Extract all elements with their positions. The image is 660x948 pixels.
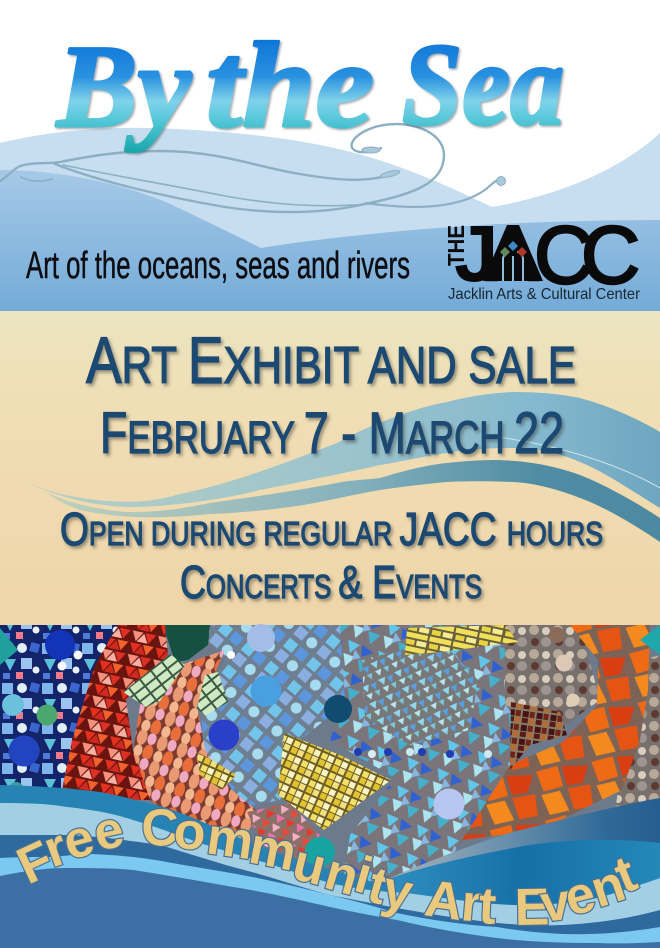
right deep blue band bbox=[385, 840, 660, 945]
panel: bottom waves bbox=[0, 785, 660, 948]
mosaic: pink fragments bbox=[247, 803, 320, 858]
logo: The JACC: C bbox=[581, 210, 640, 301]
mosaic: oval pink and orange band bbox=[132, 650, 262, 840]
title: By the Sea bbox=[55, 18, 564, 153]
panel: sand event details bbox=[0, 311, 660, 626]
logo: The JACC: A bbox=[484, 210, 542, 298]
panel: mosaic artwork bbox=[0, 624, 660, 915]
decorative swirl ribbon bbox=[0, 124, 506, 212]
dark blue band bbox=[0, 835, 660, 945]
logo: The JACC: THE bbox=[443, 225, 469, 266]
mosaic: triangle field bbox=[330, 625, 530, 900]
mosaic: silver discs bbox=[505, 625, 600, 725]
mosaic: orange shards bbox=[462, 625, 650, 840]
mosaic: small yellow block bbox=[197, 752, 236, 790]
mosaic: pale spiral bbox=[362, 640, 478, 745]
heading: dates: FEBRUARY 7 - MARCH 22 bbox=[100, 401, 564, 466]
header mid wave bbox=[0, 170, 660, 311]
mosaic: pale green tiles bbox=[123, 654, 185, 707]
light blue stripe bbox=[0, 854, 660, 948]
title: By the Sea: the bbox=[206, 18, 374, 153]
header light wave bbox=[0, 128, 660, 311]
mosaic: red fish bbox=[60, 625, 168, 800]
mosaic: yellow stripes bbox=[405, 625, 518, 655]
mosaic: glass discs bbox=[0, 624, 660, 867]
mosaic: left blue field bbox=[0, 625, 125, 800]
subtitle: Art of the oceans, seas and rivers bbox=[26, 245, 410, 287]
logo: The JACC: Jacklin Arts & Cultural Center bbox=[448, 286, 641, 303]
text: open during regular hours: OPEN DURING REGULAR JACC HOURS bbox=[60, 503, 603, 555]
mosaic: blue tile field bbox=[195, 625, 350, 810]
logo: The JACC: J bbox=[454, 209, 498, 298]
mosaic: dark green bbox=[163, 625, 210, 662]
logo: The JACC: C bbox=[534, 210, 593, 301]
heading: art exhibit and sale: ART EXHIBIT AND SALE bbox=[86, 323, 576, 397]
text: concerts and events: CONCERTS & EVENTS bbox=[180, 556, 482, 608]
title: By the Sea: Sea bbox=[402, 19, 564, 150]
swoosh wave bbox=[18, 392, 660, 542]
mosaic: large yellow tile sculpture bbox=[278, 733, 391, 830]
title: By the Sea: By bbox=[55, 21, 192, 152]
right grey-blue wave bbox=[385, 798, 660, 945]
pale blue band bbox=[0, 803, 660, 945]
mosaic: brown tiles bbox=[510, 702, 567, 770]
arched text: free community art event: Free Community Art Event bbox=[9, 799, 645, 937]
right deep blue repaint bbox=[385, 840, 660, 945]
main dark blue base bbox=[0, 868, 660, 948]
left blue band bbox=[0, 785, 660, 948]
panel: header bbox=[0, 0, 660, 311]
logo: The JACC bbox=[443, 209, 641, 303]
